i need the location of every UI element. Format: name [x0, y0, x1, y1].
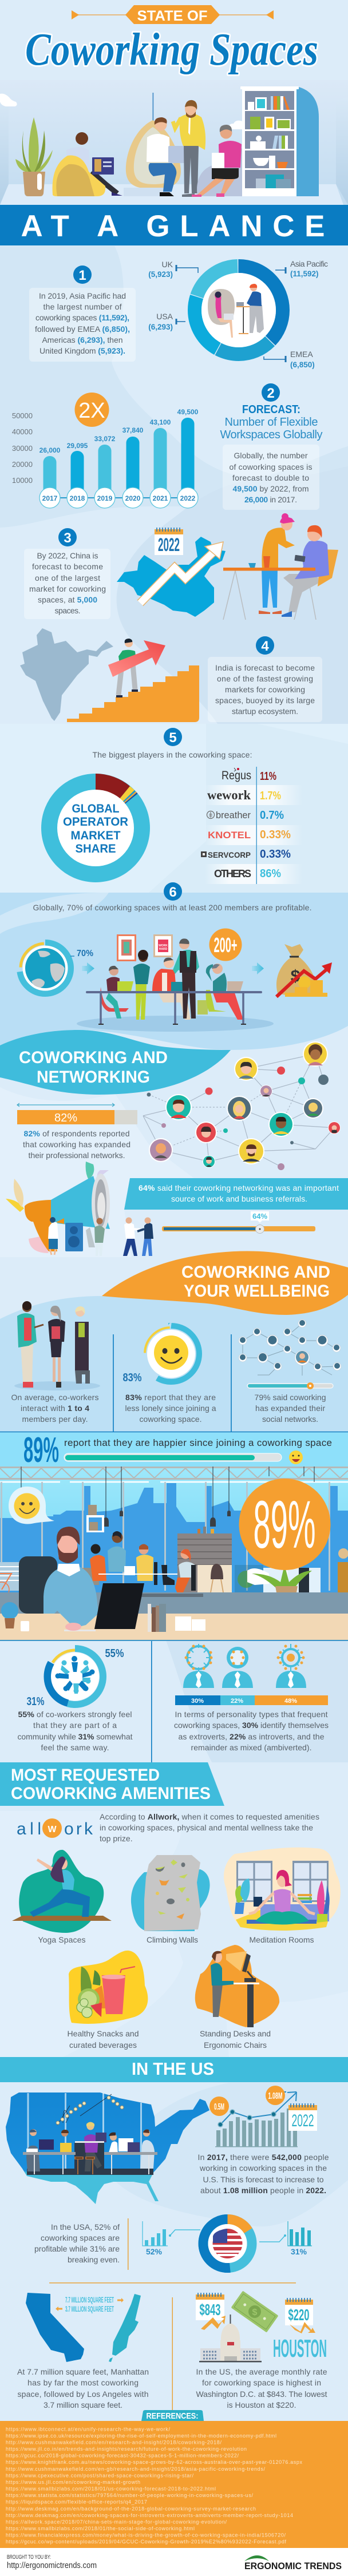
illustration: rent calendars, dollar bill and capitol: [196, 2290, 315, 2362]
donut chart: coworking spaces by region: USA: [156, 312, 173, 321]
text: manhattan: At 7.7 million square feet, Manhattan: [17, 2367, 149, 2376]
text: manhattan: space, followed by Los Angeles with: [17, 2389, 149, 2399]
illustration: team at shared desk: [77, 934, 274, 1032]
table: operator shares: Regus: [222, 769, 251, 782]
dividers: three column frame: [0, 1334, 348, 1432]
icon: potted plant: [15, 117, 53, 196]
bar chart: flexible workspaces 2017-2022: 26,000: [39, 446, 61, 454]
text: profitability: breaking even.: [68, 2255, 120, 2264]
donut chart: global operator market share: MARKET: [71, 829, 121, 842]
chart: smiley ring 83%: 83%: [122, 1372, 142, 1384]
icon: 2022 calendar teal: 2022: [292, 2111, 314, 2130]
text box: stat 4: startup ecosystem.: [232, 707, 298, 716]
text: community: 55% of co-workers strongly feel: [18, 1710, 132, 1719]
chart: community ring 55% 31%: [26, 1647, 124, 1708]
chart: us coworkers forecast: 0.5M: [214, 2102, 224, 2112]
panel: stat 3 china: [24, 513, 338, 620]
text: monthly rate: [196, 2367, 327, 2409]
section heading: most requested amenities: COWORKING AMENITIES: [11, 1784, 211, 1803]
amenity: standing desks and ergonomic chairs: Ergonomic Chairs: [204, 2040, 267, 2050]
bar chart: flexible workspaces 2017-2022: 10000: [12, 476, 33, 485]
arrow: globe to team: [82, 962, 94, 974]
text: us coworkers: working in coworking spaces in the: [199, 2163, 327, 2173]
bar chart: flexible workspaces 2017-2022: 43,100: [150, 418, 171, 426]
illustration: bookshelf: [240, 86, 319, 196]
text: manhattan: 3.7 million square feet.: [43, 2400, 122, 2409]
number badge 2: 2: [267, 386, 275, 401]
footer: [0, 2548, 348, 2576]
text box: stat 4: [208, 657, 322, 722]
reference list: http://www.deskmag.com/en/coworking-spaces-for-introverts-extroverts-ambiverts-member-report-study-1014: [6, 2512, 293, 2518]
text: 82% respondents: their professional networks.: [29, 1151, 125, 1160]
donut chart: coworking spaces by region: EMEA: [290, 350, 313, 359]
stacked bar: personality shares: 30%: [191, 1698, 204, 1705]
panel: stat 5 market share: [41, 728, 303, 884]
donut chart: coworking spaces by region: (6,293): [148, 323, 173, 331]
text: us coworkers: In 2017, there were 542,000 people: [198, 2153, 329, 2162]
section band: in the us: [0, 2057, 348, 2082]
amenity: healthy snacks and curated beverages: [68, 1951, 148, 2050]
logo: allwork: [17, 1818, 93, 1838]
table: operator shares: SERVCORP: [208, 850, 251, 859]
chart: us profitability donut with minis: 31%: [291, 2247, 307, 2256]
bar chart: flexible workspaces 2017-2022: 2018: [70, 494, 85, 502]
divider: [151, 1641, 152, 1762]
chart: us coworkers forecast: 1.08M: [268, 2091, 283, 2101]
text: less lonely: [125, 1393, 216, 1424]
reference list: http://www.cushmanwakefield.com/en/research-and-insight/2018/coworking-2018/: [6, 2440, 222, 2446]
donut chart: global operator market share: GLOBAL: [72, 802, 120, 815]
callout: 200+: [209, 928, 242, 961]
table: operator shares: [201, 767, 303, 884]
text: allwork intro: in coworking spaces, physical and mental wellness take the: [100, 1823, 313, 1832]
text: monthly rate: for coworking space is highest in: [202, 2378, 321, 2387]
logo: allwork: all: [17, 1820, 41, 1838]
text: profitability: profitable while 31% are: [34, 2244, 120, 2253]
text box: stat 3: forecast to become: [32, 562, 103, 571]
text box: stat 2: of coworking spaces is: [229, 462, 313, 471]
banner: 64% referrals: source of work and business referrals.: [171, 1194, 307, 1203]
reference list: http://www.cushmanwakefield.com/en-gb/research-and-insight/2018/asia-pacific-coworking-trends/: [6, 2466, 265, 2472]
reference list: [0, 2421, 348, 2548]
title ribbon: state of: [72, 5, 274, 24]
panel: stat 2 forecast: [12, 383, 323, 510]
map: india: [20, 628, 113, 721]
bar chart: flexible workspaces 2017-2022: 2017: [42, 494, 58, 502]
donut chart: global operator market share: OPERATOR: [63, 815, 128, 829]
logo: ergonomic trends: [244, 2555, 342, 2571]
icon: 2022 calendar: [155, 528, 183, 555]
bar chart: flexible workspaces 2017-2022: 2020: [125, 494, 141, 502]
illustration: rent calendars, dollar bill and capitol: $843: [199, 2301, 221, 2319]
chart: people network: [143, 1041, 341, 1170]
logo: allwork: ork: [64, 1820, 93, 1838]
text: social networks: social networks.: [262, 1414, 318, 1424]
title ribbon: state of: STATE OF: [137, 8, 207, 24]
chart: community ring 55% 31%: 55%: [105, 1647, 124, 1660]
banner: 64% referrals: 64% said their coworking networking was an important: [139, 1183, 339, 1192]
text: us coworkers: about 1.08 million people in 2022.: [200, 2186, 326, 2195]
number badge 5: 5: [169, 730, 177, 746]
text box: stat 3: market for coworking: [29, 584, 106, 593]
icon: 2022 calendar: 2022: [158, 534, 180, 555]
text: monthly rate: is Houston at $220.: [227, 2400, 296, 2409]
text: profitability: coworking spaces are: [41, 2233, 120, 2242]
subheading: number of flexible workspaces: Workspaces Globally: [220, 429, 323, 441]
chart: community ring 55% 31%: 31%: [26, 1695, 45, 1708]
chart: smiley ring 83%: [122, 1326, 199, 1384]
text box: stat 4: markets for coworking: [225, 685, 305, 694]
amenity: yoga spaces: Yoga Spaces: [38, 1935, 86, 1944]
credit: brought to you by: [7, 2554, 97, 2570]
text box: stat 2: 49,500 by 2022, from: [232, 484, 309, 493]
text box: stat 1: followed by EMEA (6,850),: [35, 324, 130, 334]
text box: stat 1: Americas (6,293), then: [42, 335, 122, 344]
donut chart: global operator market share: SHARE: [76, 842, 116, 855]
text box: stat 2: Globally, the number: [234, 451, 308, 460]
illustration: team at shared desk: HARD: [159, 948, 168, 951]
band: at a glance: AT A GLANCE: [21, 209, 325, 243]
illustration: seated person with tablet: [192, 125, 255, 197]
amenity: climbing walls: [131, 1855, 210, 1944]
illustration: stairs and man carrying arrow: [67, 639, 199, 722]
number badge 4: 4: [261, 639, 269, 654]
illustration: rent calendars, dollar bill and capitol: $: [252, 2308, 258, 2317]
amenity: climbing walls: Climbing Walls: [147, 1935, 198, 1944]
strip: 89% happier: [0, 1430, 348, 1470]
number badge 6: [164, 882, 182, 901]
text: social networks: 79% said coworking: [254, 1393, 326, 1402]
bar chart: flexible workspaces 2017-2022: 2022: [180, 494, 196, 502]
text box: stat 2: 26,000 in 2017.: [244, 495, 297, 504]
reference list: https://www.ipse.co.uk/resource/exploring-the-rise-of-self-employment-in-the-modern-economy-pdf.html: [6, 2433, 276, 2439]
text: members per day: [11, 1393, 98, 1424]
bar chart: flexible workspaces 2017-2022: 2019: [97, 494, 113, 502]
illustration: egg chair: [124, 93, 181, 196]
chart: us coworkers forecast: [209, 2086, 317, 2147]
heading: forecast: FORECAST:: [242, 403, 300, 416]
text box: stat 3: one of the largest: [35, 573, 100, 582]
avatar node group: [147, 1043, 340, 1170]
reference list: https://www.jll.co.in/en/trends-and-insights/research/future-of-work-the-coworking-revolution: [6, 2446, 247, 2452]
divider: [49, 2282, 296, 2283]
text: personality types: coworking spaces, 30% identify themselves: [174, 1721, 329, 1730]
divider: [172, 2297, 173, 2411]
section heading: coworking and networking: [0, 1030, 231, 1095]
donut chart: coworking spaces by region: UK: [162, 260, 173, 269]
text: community: [17, 1710, 133, 1752]
table: operator shares: 1.7%: [260, 790, 281, 802]
bar chart: flexible workspaces 2017-2022: [12, 408, 199, 508]
text: social networks: has expanded their: [255, 1404, 325, 1413]
number badge 5: [164, 728, 182, 746]
chart: us profitability donut with minis: [143, 2219, 312, 2268]
illustration: man on yellow bean bag with laptop: [53, 132, 122, 196]
reference list: https://www.smallbizlabs.com/2018/01/us-coworking-forecast-2018-to-2022.html: [6, 2486, 216, 2491]
text box: stat 3: [24, 549, 110, 619]
reference list: https://www.cpexecutive.com/post/shared-space-coworkings-rising-star/: [6, 2472, 193, 2478]
stacked bar: personality shares: 22%: [231, 1698, 243, 1705]
bar chart: flexible workspaces 2017-2022: 37,840: [122, 426, 144, 434]
reference list: https://gcuc.co/wp-content/uploads/2019/04/GCUC-Coworking-Growth-2019%E2%80%932022-Forecast.pdf: [6, 2539, 286, 2545]
illustration: team at shared desk: WORK: [159, 944, 168, 948]
progress bar: 82%: 82%: [54, 1112, 77, 1124]
text box: stat 1: coworking spaces (11,592),: [35, 313, 129, 322]
illustration: megaphone and people: [6, 1162, 153, 1256]
panel: stat 1 regional coworking spaces: [29, 259, 328, 369]
reference list: https://www.statista.com/statistics/797564/number-of-people-working-in-coworking-spaces-us/: [6, 2492, 253, 2498]
arrow: team to profit: [252, 962, 264, 974]
logo: ergonomic trends: ERGONOMIC TRENDS: [244, 2561, 342, 2571]
icons: personality type figures: [183, 1644, 306, 1688]
table: operator shares: 11%: [260, 770, 276, 783]
text: less lonely: 83% report that they are: [125, 1393, 216, 1402]
text: personality types: [174, 1710, 329, 1752]
text: 82% respondents: that coworking has expanded: [23, 1140, 130, 1149]
table: operator shares: 0.33%: [260, 829, 291, 841]
reference list: https://www.us.jll.com/en/coworking-market-growth: [6, 2479, 140, 2485]
illustration: open office scene: [0, 1467, 348, 1641]
text: personality types: as extroverts, 22% as introverts, and the: [179, 1732, 325, 1741]
table: operator shares: OTHERS: [214, 868, 251, 879]
reference list: https://www.smallbizlabs.com/2018/01/the-social-side-of-coworking.html: [6, 2526, 195, 2531]
credit: brought to you by: BROUGHT TO YOU BY:: [7, 2554, 51, 2561]
panel: stat 6 profitability: [21, 882, 332, 1032]
text: manhattan: [17, 2367, 149, 2409]
text box: stat 3: spaces.: [55, 606, 80, 615]
reference list: http://www.deskmag.com/en/background-of-the-2018-global-coworking-survey-market-research: [6, 2506, 256, 2511]
bar chart: flexible workspaces 2017-2022: 2021: [153, 494, 168, 502]
text: members per day: members per day.: [22, 1414, 88, 1424]
strip: 89% happier: 89%: [23, 1430, 59, 1470]
section heading: coworking and your wellbeing: COWORKING AND: [181, 1263, 330, 1282]
donut chart: coworking spaces by region: (6,850): [290, 360, 315, 369]
section heading: coworking and networking: COWORKING AND: [19, 1048, 168, 1067]
icon: 2022 calendar teal: [288, 2103, 317, 2131]
text: members per day: interact with 1 to 4: [21, 1404, 89, 1413]
bar chart: flexible workspaces 2017-2022: 40000: [12, 427, 33, 436]
section heading: most requested amenities: MOST REQUESTED: [11, 1766, 160, 1785]
text: us coworkers: [198, 2153, 329, 2195]
text box: stat 3: By 2022, China is: [37, 551, 98, 560]
section heading: most requested amenities: [0, 1762, 224, 1806]
chart: social network 79%: [239, 1319, 341, 1389]
text box: stat 4: India is forecast to become: [215, 663, 315, 672]
number badge 1: 1: [78, 268, 86, 283]
bar chart: flexible workspaces 2017-2022: 20000: [12, 460, 33, 469]
icon: money bag and rising arrow: $: [291, 967, 300, 986]
number badge 3: 3: [64, 530, 72, 546]
bar chart: flexible workspaces 2017-2022: 29,095: [67, 442, 88, 450]
text: personality types: remainder as mixed (ambiverted).: [191, 1743, 311, 1752]
callout: 2x: 2X: [78, 399, 105, 423]
text: less lonely: coworking space.: [140, 1414, 201, 1424]
illustration: three coworkers talking: [14, 1301, 100, 1390]
text: manhattan: has by far the most coworking: [27, 2378, 139, 2387]
callout: 200+: 200+: [214, 933, 237, 957]
progress bar: 82%: [17, 1103, 137, 1124]
reference list: https://www.financialexpress.com/money/what-is-driving-the-growth-of-co-working-space-in-india/1506720/: [6, 2533, 286, 2538]
text: monthly rate: In the US, the average monthly rate: [196, 2367, 327, 2376]
bar chart: flexible workspaces 2017-2022: 50000: [12, 411, 33, 420]
number badge 2: [262, 383, 280, 402]
callout: smiley speech bubble: [9, 1487, 54, 1524]
text: profitability: [34, 2222, 120, 2264]
text: personality types: In terms of personality types that frequent: [175, 1710, 328, 1719]
panel: coworking and your wellbeing: [0, 1251, 348, 1641]
amenity: meditation rooms: Meditation Rooms: [250, 1935, 314, 1944]
panel: stat 4 india: [20, 628, 322, 722]
reference list: https://gcuc.co/2018-global-coworking-forecast-30432-spaces-5-1-million-members-2022/: [6, 2453, 239, 2459]
table: operator shares: wework: [207, 788, 251, 802]
text: members per day: On average, co-workers: [11, 1393, 98, 1402]
text: monthly rate: Washington D.C. at $843. The lowest: [196, 2389, 327, 2399]
section heading: coworking and your wellbeing: [102, 1251, 348, 1315]
amenity: healthy snacks and curated beverages: Healthy Snacks and: [68, 2029, 139, 2038]
donut chart: global operator market share: [41, 774, 150, 882]
text box: stat 4: one of the fastest growing: [217, 674, 313, 683]
globe chart: 70%: [21, 944, 93, 993]
icon: woman in egg chair and standing man: [208, 284, 264, 338]
donut chart: coworking spaces by region: [148, 259, 328, 369]
credit: brought to you by: http://ergonomictrends.com: [7, 2561, 97, 2570]
donut chart: coworking spaces by region: Asia Pacific: [290, 259, 328, 268]
table: operator shares: breather: [216, 810, 251, 821]
illustration: two people at orange desk: [223, 513, 338, 620]
map: china with rising arrow: [117, 537, 226, 617]
text box: stat 2: forecast to double to: [232, 473, 309, 482]
panel: most requested coworking amenities: [0, 1762, 341, 2050]
stacked bar: personality shares: [175, 1695, 328, 1705]
text: allwork intro: top prize.: [100, 1834, 133, 1843]
bar chart: flexible workspaces 2017-2022: 30000: [12, 444, 33, 453]
amenity: healthy snacks and curated beverages: curated beverages: [69, 2040, 137, 2050]
table: operator shares: 86%: [260, 867, 281, 880]
bar chart: flexible workspaces 2017-2022: 49,500: [177, 408, 199, 416]
panel: community and personality: [17, 1641, 329, 1762]
text: allwork intro: According to Allwork, when it comes to requested amenities: [100, 1812, 319, 1821]
slider: 64%: [162, 1211, 315, 1234]
maps: california and manhattan: 7.7 MILLION SQUARE FEET: [65, 2295, 114, 2304]
reference list: https://www.ibtconnect.at/en/unify-research-the-way-we-work/: [6, 2426, 170, 2432]
maps: california and manhattan: 3.7 MILLION SQUARE FEET: [65, 2304, 114, 2313]
text: community: that they are part of a: [33, 1721, 117, 1730]
text: us coworkers: U.S. This is forecast to increase to: [203, 2175, 324, 2184]
map: usa with coworking scene: [0, 0, 209, 2204]
text box: stat 3: spaces, at 5,000: [38, 595, 97, 604]
text box: stat 2: [223, 445, 319, 510]
tab: references: REFERENCES:: [147, 2411, 198, 2421]
section heading: coworking and networking: NETWORKING: [37, 1068, 150, 1087]
section heading: coworking and your wellbeing: YOUR WELLBEING: [184, 1282, 330, 1301]
text: 82% respondents: [23, 1129, 130, 1160]
text: 70% profitable: Globally, 70% of coworking spaces with at least 200 members are profitable.: [33, 903, 311, 912]
text: profitability: In the USA, 52% of: [51, 2222, 120, 2232]
amenity: yoga spaces: [12, 1850, 112, 1944]
text: community: community while 31% somewhat: [17, 1732, 133, 1741]
header panel: [0, 5, 348, 245]
number badge 3: [58, 528, 77, 546]
subheading: number of flexible workspaces: [220, 416, 323, 441]
callout: 89% circle: [239, 1479, 331, 1570]
subheading: number of flexible workspaces: Number of Flexible: [224, 416, 318, 429]
table: operator shares: KNOTEL: [208, 830, 251, 841]
header room illustration background: [0, 80, 348, 205]
reference list: https://www.knightfrank.com.au/news/coworking-space-grows-by-62-across-australia-over-past-year-012076.aspx: [6, 2459, 303, 2465]
logo: allwork: W: [48, 1825, 57, 1834]
intro text: biggest players: The biggest players in the coworking space:: [93, 750, 252, 759]
bar chart: flexible workspaces 2017-2022: 33,072: [94, 435, 116, 443]
donut chart: coworking spaces by region: (11,592): [290, 270, 319, 278]
table: operator shares: 0.33%: [260, 848, 291, 861]
text: social networks: [254, 1393, 326, 1424]
callout: 2x: [74, 393, 109, 427]
amenity: standing desks and ergonomic chairs: Standing Desks and: [200, 2029, 271, 2038]
illustration: standing man in yellow shirt: [173, 100, 205, 197]
donut chart: coworking spaces by region: (5,923): [148, 270, 173, 279]
number badge 1: [73, 265, 92, 284]
text: 82% respondents: 82% of respondents reported: [24, 1129, 129, 1138]
chart: us profitability donut with minis: 52%: [146, 2247, 163, 2256]
number badge 6: 6: [169, 885, 177, 900]
maps: california and manhattan: [26, 2293, 141, 2362]
reference list: https://allwork.space/2018/07/china-sets-main-stage-for-global-coworking-evolution/: [6, 2519, 227, 2525]
banner: 64% referrals: [124, 1178, 348, 1210]
illustration: seated man in white shirt: [147, 117, 190, 196]
illustration: rent calendars, dollar bill and capitol: $220: [288, 2306, 309, 2324]
amenity: meditation rooms: [224, 1848, 341, 1944]
text box: stat 1: United Kingdom (5,923).: [39, 346, 125, 355]
panel: coworking and networking: [0, 1030, 348, 1256]
text box: stat 4: spaces, buoyed by its large: [215, 696, 315, 705]
text: less lonely: less lonely since joining a: [125, 1404, 216, 1413]
amenity: standing desks and ergonomic chairs: [195, 1945, 279, 2050]
stacked bar: personality shares: 48%: [284, 1698, 297, 1705]
section band: in the us: IN THE US: [132, 2059, 214, 2079]
text box: stat 1: the largest number of: [43, 302, 122, 311]
text box: stat 1: [29, 288, 136, 362]
table: operator shares: 0.7%: [260, 809, 284, 822]
slider: 64%: 64%: [252, 1212, 267, 1220]
reference list: https://liquidspace.com/flexible-office-reports/q4_2017: [6, 2499, 147, 2505]
globe chart: 70%: 70%: [77, 949, 93, 958]
strip: 89% happier: report that they are happier since joining a coworking space: [64, 1437, 332, 1448]
panel: references: [0, 2410, 348, 2548]
number badge 4: [256, 636, 274, 655]
text: allwork intro: [100, 1812, 319, 1843]
text box: stat 1: In 2019, Asia Pacific had: [39, 291, 126, 300]
text: community: feel the same way.: [41, 1743, 109, 1752]
icon: money bag and rising arrow: [276, 944, 332, 997]
